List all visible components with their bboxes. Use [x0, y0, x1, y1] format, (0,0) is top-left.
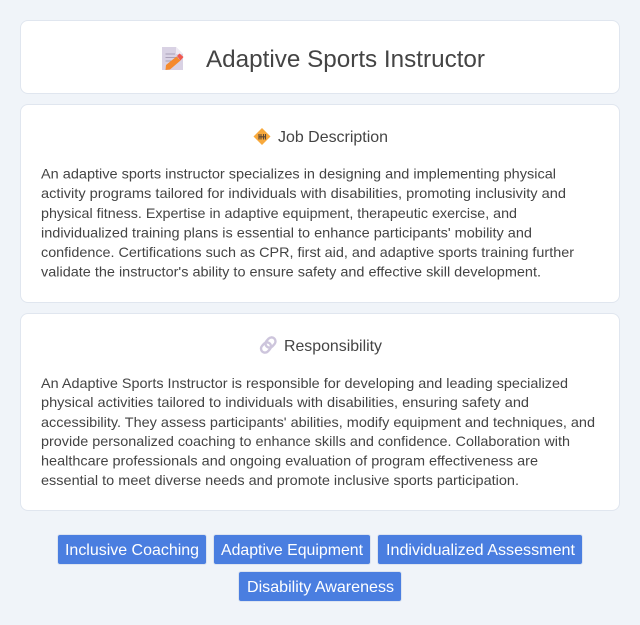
- text block: responsibility body: healthcare professionals and ongoing evaluation of program effectiveness are: [41, 452, 538, 468]
- text block: job description body: An adaptive sports instructor specializes in designing and implementing physical: [41, 166, 556, 182]
- title: Adaptive Sports Instructor: [206, 46, 485, 73]
- panel: title card: [20, 20, 620, 94]
- tag: adaptive equipment: Adaptive Equipment: [221, 542, 364, 559]
- tag: inclusive coaching: [57, 534, 207, 565]
- text block: responsibility body: accessibility. They assess participants' abilities, modify equipment and techniques, and: [41, 414, 595, 430]
- text block: job description body: physical fitness. Expertise in adaptive equipment, therapeutic exercise, and: [41, 205, 517, 221]
- icon: chain link: [259, 336, 277, 354]
- tag: disability awareness: [238, 571, 402, 602]
- text block: job description body: individualized training plans is essential to enhance participants' mobility and: [41, 224, 532, 240]
- text block: responsibility body: provide personalized coaching to enhance skills and confidence. Collaboration with: [41, 433, 570, 449]
- panel: job description: [20, 104, 620, 303]
- text block: job description body: activity programs tailored for individuals with disabilities, promoting inclusivity and: [41, 185, 566, 201]
- tag: inclusive coaching: Inclusive Coaching: [65, 542, 199, 559]
- text block: job description body: confidence. Certifications such as CPR, first aid, and adaptive sports training further: [41, 244, 574, 260]
- text block: responsibility body: [41, 375, 595, 488]
- text block: responsibility body: An Adaptive Sports Instructor is responsible for developing and leading specialized: [41, 375, 568, 391]
- text block: job description body: [41, 166, 574, 280]
- tag: adaptive equipment: [213, 534, 371, 565]
- text block: responsibility body: essential to meet diverse needs and promote inclusive sports participation.: [41, 472, 519, 488]
- icon: document with pencil: [162, 47, 184, 70]
- panel: responsibility: [20, 313, 620, 511]
- tag: disability awareness: Disability Awareness: [247, 579, 394, 596]
- heading: job description: Job Description: [278, 129, 388, 146]
- tag: individualized assessment: Individualized Assessment: [386, 542, 576, 559]
- icon: orange diamond: [254, 128, 270, 145]
- tag: individualized assessment: [377, 534, 583, 565]
- heading: responsibility: Responsibility: [284, 338, 382, 355]
- text block: job description body: validate the instructor's ability to ensure safety and effective skill development.: [41, 264, 541, 280]
- text block: responsibility body: physical activities tailored to individuals with disabilities, ensuring safety and: [41, 394, 529, 410]
